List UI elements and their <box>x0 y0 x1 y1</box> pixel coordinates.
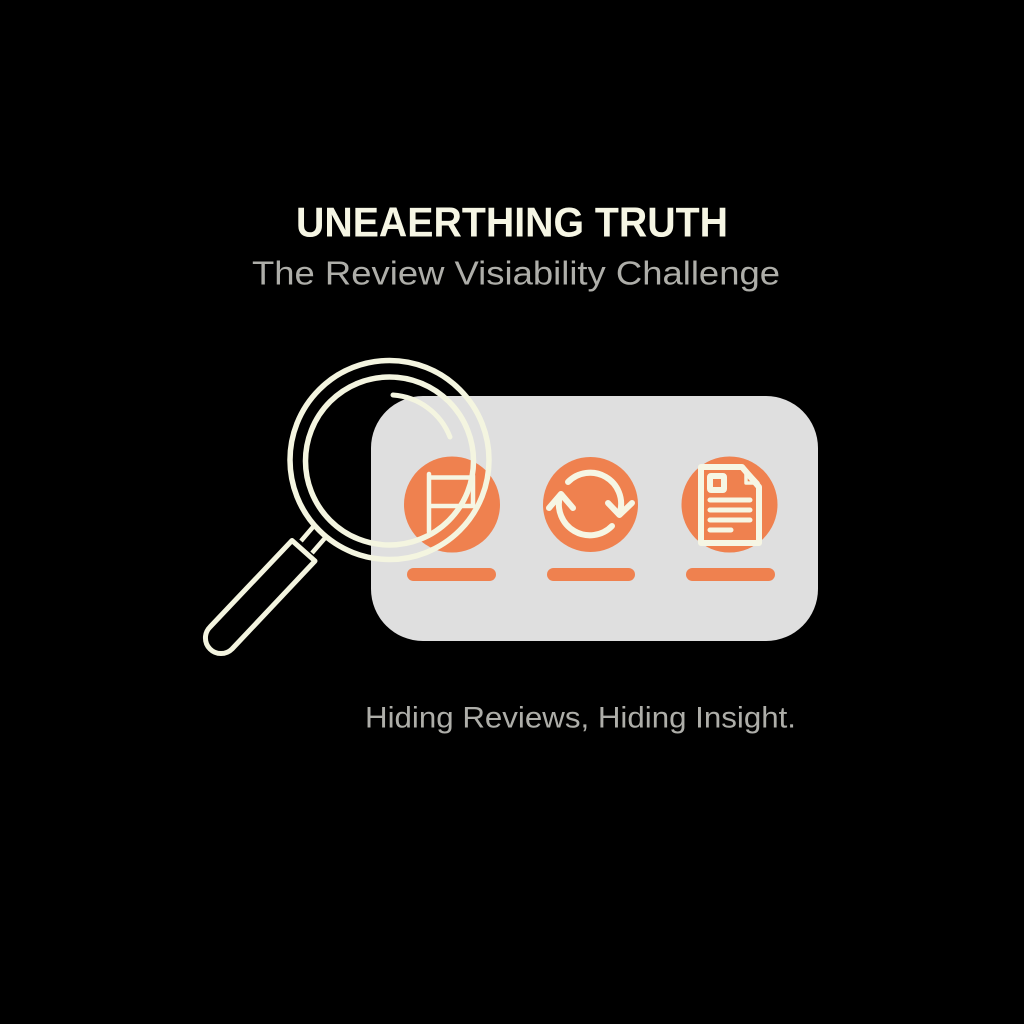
bar: refresh label <box>547 568 635 581</box>
title: UNEAERTHING TRUTH <box>296 198 728 246</box>
icon: refresh arrows <box>543 457 638 552</box>
icon: document <box>682 456 778 552</box>
icon: magnifying glass <box>205 360 489 654</box>
bar: document label <box>686 568 775 581</box>
subtitle: The Review Visiability Challenge <box>252 256 780 292</box>
tagline: Hiding Reviews, Hiding Insight. <box>365 702 796 734</box>
icon: flag <box>404 456 500 552</box>
panel: review card <box>371 396 818 641</box>
bar: flag label <box>407 568 496 581</box>
